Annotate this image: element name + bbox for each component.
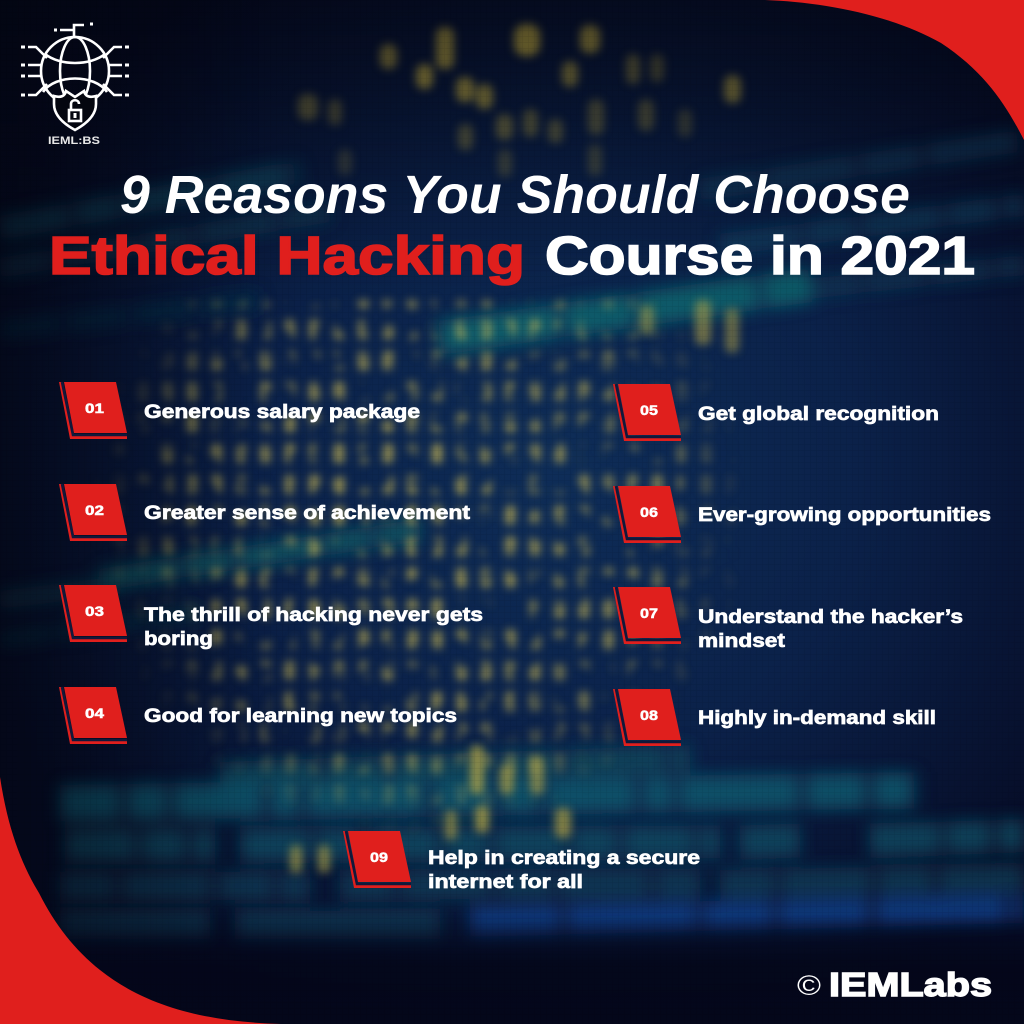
title line 1: 9 Reasons You Should Choose bbox=[120, 165, 910, 225]
red corner: top right bbox=[765, 0, 1024, 140]
title line 2: Course in 2021 bbox=[545, 226, 975, 286]
reason 01 text: Generous salary package bbox=[144, 402, 420, 423]
reason 03 text: The thrill of hacking never gets bbox=[144, 605, 483, 626]
reason 01 bbox=[59, 382, 420, 439]
reason 05 text: Get global recognition bbox=[698, 404, 939, 425]
reason 06 text: Ever-growing opportunities bbox=[698, 505, 991, 526]
reason 08 text: Highly in-demand skill bbox=[698, 708, 936, 729]
badge 07: 07 bbox=[640, 606, 658, 621]
badge 01: 01 bbox=[85, 401, 105, 416]
badge 07 bbox=[613, 587, 681, 644]
icon: globe bbox=[21, 24, 129, 105]
icon: copyright symbol: © bbox=[797, 970, 821, 1001]
badge 09 bbox=[343, 831, 411, 888]
badge 09: 09 bbox=[370, 850, 388, 865]
badge 01 bbox=[59, 382, 127, 439]
reason 04 text: Good for learning new topics bbox=[144, 706, 457, 727]
logo: IEMLabs globe and shield bbox=[21, 24, 129, 147]
reason 08 bbox=[613, 689, 936, 746]
badge 02 bbox=[59, 484, 127, 541]
reason 05 bbox=[613, 384, 939, 441]
reason 06 bbox=[613, 486, 991, 543]
reason 03 text bbox=[144, 605, 483, 650]
reason 02 bbox=[59, 484, 471, 541]
title line 2 bbox=[49, 226, 975, 286]
badge 05 bbox=[613, 384, 681, 441]
reason 04 bbox=[59, 687, 457, 744]
red corner: bottom left bbox=[0, 777, 281, 1024]
title bbox=[49, 165, 975, 286]
reason 09 text: Help in creating a secure bbox=[428, 848, 700, 869]
badge 06: 06 bbox=[640, 505, 659, 520]
badge 02: 02 bbox=[85, 503, 104, 518]
reason 09 bbox=[343, 831, 700, 893]
reason 07 bbox=[613, 587, 963, 652]
badge 05: 05 bbox=[640, 403, 659, 418]
badge 03 bbox=[59, 585, 127, 642]
brand name: IEMLabs bbox=[829, 966, 992, 1003]
reason 09 text bbox=[428, 848, 700, 893]
reason 02 text: Greater sense of achievement bbox=[144, 503, 471, 524]
icon: shield with padlock bbox=[54, 91, 96, 130]
badge 08: 08 bbox=[640, 708, 659, 723]
badge 06 bbox=[613, 486, 681, 543]
reason 03 text: boring bbox=[144, 629, 213, 650]
reason 03 bbox=[59, 585, 483, 650]
reason 07 text: mindset bbox=[698, 631, 786, 652]
badge 04 bbox=[59, 687, 127, 744]
reason 09 text: internet for all bbox=[428, 872, 583, 893]
reason 07 text: Understand the hacker’s bbox=[698, 607, 963, 628]
reason 07 text bbox=[698, 607, 963, 652]
copyright: IEMLabs bbox=[797, 966, 992, 1003]
badge 08 bbox=[613, 689, 681, 746]
title line 2: Ethical Hacking bbox=[49, 226, 525, 286]
badge 04: 04 bbox=[85, 706, 105, 721]
logo wordmark: IEML:BS bbox=[48, 135, 100, 147]
badge 03: 03 bbox=[85, 604, 105, 619]
